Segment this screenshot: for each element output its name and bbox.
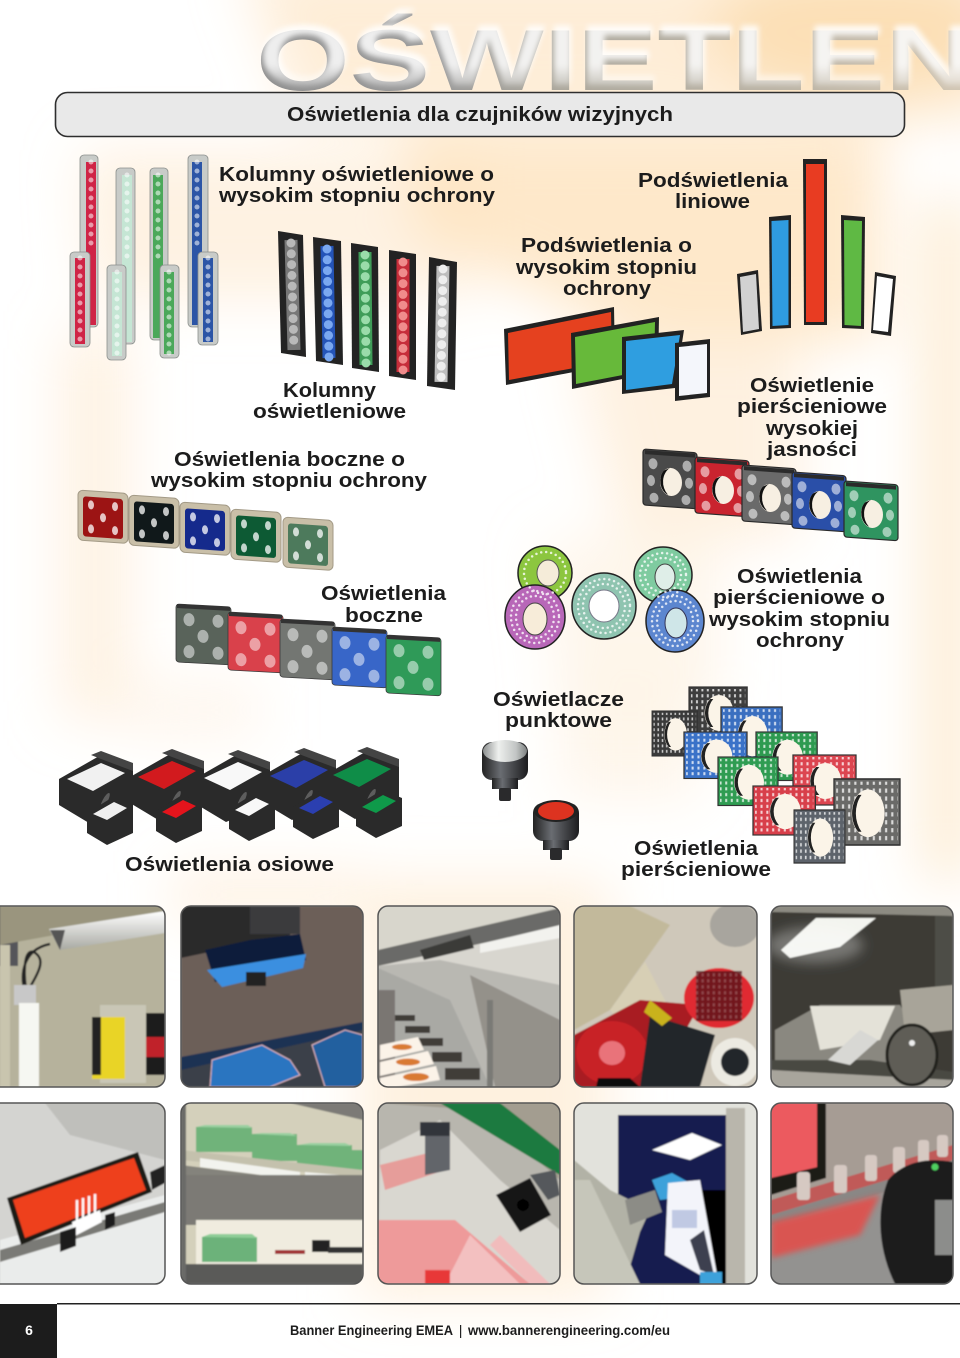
product: high-protection backlight panels xyxy=(504,307,710,401)
label: axial lights: Oświetlenia osiowe xyxy=(125,854,334,876)
label: high-brightness ring lights: wysokiej xyxy=(765,418,858,440)
photo: sensor inspecting metal part under red light xyxy=(378,1103,560,1284)
label: high-protection ring lights xyxy=(708,566,890,652)
label: high-protection side lights: Oświetlenia boczne o xyxy=(174,449,405,471)
photo: blue-lit vision sensor over tray xyxy=(181,906,363,1087)
label: ring lights xyxy=(621,838,771,881)
label: high-protection columns: wysokim stopniu ochrony xyxy=(218,185,496,207)
label: high-brightness ring lights: pierścieniowe xyxy=(737,396,887,418)
label: high-protection ring lights: ochrony xyxy=(756,630,845,652)
label: light columns: oświetleniowe xyxy=(253,401,406,423)
label: light columns: Kolumny xyxy=(283,380,377,402)
product: side lights xyxy=(176,604,441,696)
label: high-protection backlights: wysokim stopniu xyxy=(515,257,697,279)
label: line backlights xyxy=(638,170,789,213)
photo: shelves with green bins xyxy=(181,1103,363,1284)
product: high-brightness ring lights xyxy=(643,449,898,541)
heading banner: Oświetlenia dla czujników wizyjnych xyxy=(287,104,673,126)
footer: page number tab xyxy=(0,1304,57,1358)
label: high-protection backlights xyxy=(515,235,697,300)
label: high-protection side lights xyxy=(150,449,428,492)
label: high-brightness ring lights: jasności xyxy=(766,439,857,461)
photo: conveyor with packaged food xyxy=(378,906,560,1087)
product: high-protection side lights xyxy=(78,490,333,570)
label: high-protection columns xyxy=(218,164,496,207)
label: high-protection ring lights: wysokim stopniu xyxy=(708,609,890,631)
footer: company and web address: www.bannerengineering.com/eu xyxy=(467,1323,670,1338)
background title: OŚWIETLEN: OŚWIETLEN xyxy=(256,13,960,109)
label: side lights: boczne xyxy=(345,605,423,627)
footer: rule xyxy=(57,1303,960,1304)
product: ring lights xyxy=(505,546,704,652)
label: spot lights: Oświetlacze xyxy=(493,689,624,711)
product: axial lights xyxy=(59,747,402,845)
background title: OŚWIETLEN xyxy=(256,8,960,109)
photo: light bar over cabinet xyxy=(0,906,165,1087)
label: side lights: Oświetlenia xyxy=(321,583,447,605)
label: high-protection backlights: ochrony xyxy=(563,278,652,300)
background title: OŚWIETLEN: OŚWIETLEN xyxy=(258,8,960,104)
label: side lights xyxy=(321,583,447,627)
label: line backlights: Podświetlenia xyxy=(638,170,789,192)
product: square ring lights xyxy=(652,687,900,863)
label: high-brightness ring lights: Oświetlenie xyxy=(750,375,874,397)
footer: company and web address xyxy=(290,1323,670,1338)
footer: page number tab: 6 xyxy=(25,1322,33,1338)
label: ring lights: pierścieniowe xyxy=(621,859,771,881)
footer: company and web address: Banner Engineering EMEA xyxy=(290,1323,453,1338)
photo: operator inspecting bag under light xyxy=(574,1103,757,1284)
product: black light columns xyxy=(278,231,457,390)
product: spot lights xyxy=(482,740,579,860)
label: spot lights: punktowe xyxy=(505,710,612,732)
label: line backlights: liniowe xyxy=(675,191,750,213)
label: high-protection backlights: Podświetlenia o xyxy=(521,235,692,257)
label: ring lights: Oświetlenia xyxy=(634,838,759,860)
label: spot lights xyxy=(493,689,624,732)
label: high-brightness ring lights xyxy=(737,375,887,461)
label: light columns xyxy=(253,380,406,423)
label: high-protection ring lights: Oświetlenia xyxy=(737,566,863,588)
label: high-protection ring lights: pierścieniowe o xyxy=(713,587,885,609)
photo: red backlight with comb part xyxy=(0,1103,165,1284)
heading banner xyxy=(56,92,904,136)
photo: vials on conveyor with red light xyxy=(771,1103,953,1284)
label: high-protection columns: Kolumny oświetleniowe o xyxy=(219,164,494,186)
photo: barcode reader and red disc xyxy=(574,903,760,1087)
photo: area light over machine part xyxy=(767,906,953,1087)
label: high-protection side lights: wysokim stopniu ochrony xyxy=(150,470,428,492)
product: line backlights xyxy=(737,159,896,336)
product: high-protection light columns xyxy=(70,155,218,360)
